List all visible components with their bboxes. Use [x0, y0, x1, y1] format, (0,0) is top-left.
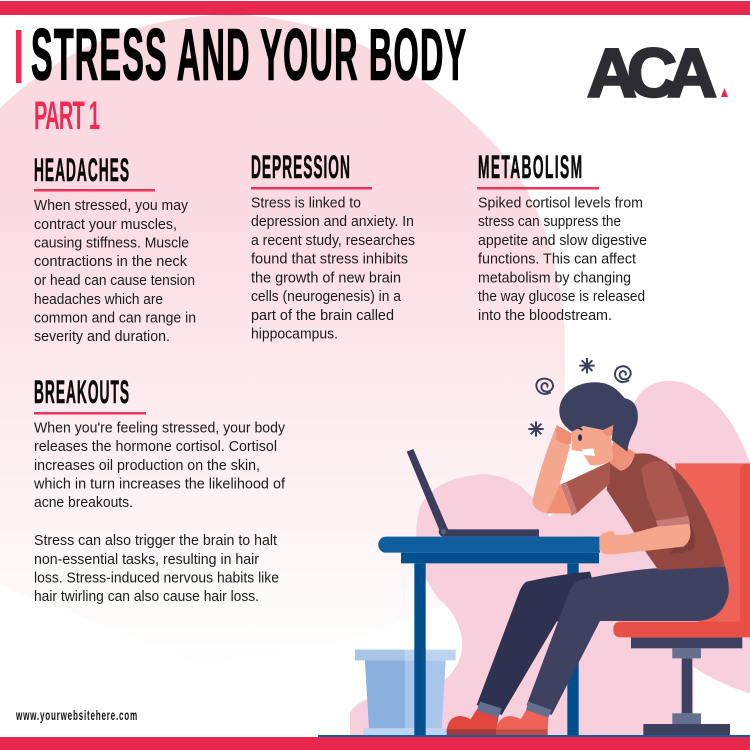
icon: dizzy spiral right	[615, 366, 631, 382]
panel: breakouts: BREAKOUTS	[34, 376, 129, 411]
logo: ACA: ACA	[587, 34, 717, 112]
near arm and fist	[599, 524, 690, 554]
chair	[613, 463, 750, 735]
panel: headaches: HEADACHES	[34, 154, 129, 189]
panel: headaches: causing stiffness. Muscle	[34, 236, 189, 252]
panel: headaches: severity and duration.	[34, 329, 170, 345]
panel: depression	[251, 151, 415, 342]
panel: depression: depression and anxiety. In	[251, 214, 414, 230]
desk	[378, 537, 600, 735]
illustration: stressed person at desk	[350, 358, 750, 735]
near leg	[527, 567, 729, 715]
panel: headaches	[34, 154, 196, 345]
panel: depression: part of the brain called	[251, 308, 394, 324]
panel: headaches: headaches which are	[34, 292, 163, 308]
desk far leg	[567, 563, 579, 735]
top band	[0, 1, 750, 15]
panel: metabolism	[477, 151, 647, 324]
panel: breakouts: hair twirling can also cause hair loss.	[34, 589, 259, 605]
icon: dizzy spiral left	[536, 379, 553, 394]
pink backdrop blob	[350, 381, 750, 735]
panel: breakouts: acne breakouts.	[34, 495, 133, 511]
face	[572, 425, 613, 465]
hair	[559, 382, 638, 452]
panel: metabolism: the way glucose is released	[478, 289, 645, 305]
neck	[608, 440, 637, 472]
panel: breakouts: loss. Stress-induced nervous habits like	[34, 570, 279, 586]
shirt	[607, 453, 725, 570]
panel: metabolism: appetite and slow digestive	[478, 233, 647, 249]
panel: headaches: common and can range in	[34, 310, 196, 326]
panel: headaches: When stressed, you may	[34, 198, 189, 214]
far arm	[533, 425, 572, 513]
panel: breakouts: increases oil production on the skin,	[34, 458, 260, 474]
background blob: large pink gradient	[0, 15, 565, 665]
panel: breakouts: non-essential tasks, resulting in hair	[34, 552, 259, 568]
person	[447, 382, 729, 735]
panel: depression: cells (neurogenesis) in a	[251, 289, 402, 305]
panel: metabolism: functions. This can affect	[478, 252, 636, 268]
far shoe	[447, 709, 498, 730]
far sleeve	[560, 462, 610, 513]
panel: metabolism: METABOLISM	[478, 151, 582, 186]
subtitle: PART 1	[34, 92, 100, 138]
panel: depression: the growth of new brain	[251, 270, 401, 286]
floor line	[318, 735, 750, 737]
panel: breakouts: which in turn increases the likelihood of	[33, 476, 286, 492]
panel: breakouts: Stress can also trigger the brain to halt	[34, 533, 277, 549]
bottom band	[0, 737, 750, 750]
panel: headaches: or head can cause tension	[34, 273, 195, 289]
panel: headaches: contractions in the neck	[34, 254, 188, 270]
icon: asterisk left	[528, 421, 544, 437]
panel: breakouts: When you're feeling stressed, your body	[34, 420, 286, 436]
panel: metabolism: metabolism by changing	[478, 270, 631, 286]
laptop	[407, 449, 539, 537]
panel: metabolism: into the bloodstream.	[478, 308, 612, 324]
panel: depression: DEPRESSION	[251, 151, 350, 186]
far leg	[477, 572, 603, 715]
panel: depression: found that stress inhibits	[251, 252, 408, 268]
panel: breakouts	[33, 376, 286, 605]
panel: depression: a recent study, researches	[251, 233, 415, 249]
panel: breakouts: releases the hormone cortisol. Cortisol	[34, 439, 277, 455]
panel: headaches: contract your muscles,	[34, 217, 177, 233]
panel: metabolism: Spiked cortisol levels from	[478, 196, 643, 212]
panel: metabolism: stress can suppress the	[478, 214, 621, 230]
title: STRESS AND YOUR BODY	[31, 14, 466, 95]
waste bin	[355, 650, 456, 735]
panel: depression: hippocampus.	[251, 326, 338, 342]
ear	[603, 424, 615, 436]
panel: depression: Stress is linked to	[251, 196, 361, 212]
near sleeve	[642, 461, 688, 521]
title accent bar	[16, 30, 22, 83]
near shoe	[496, 709, 548, 730]
website url: www.yourwebsitehere.com	[15, 709, 137, 724]
icon: asterisk top	[579, 358, 595, 373]
